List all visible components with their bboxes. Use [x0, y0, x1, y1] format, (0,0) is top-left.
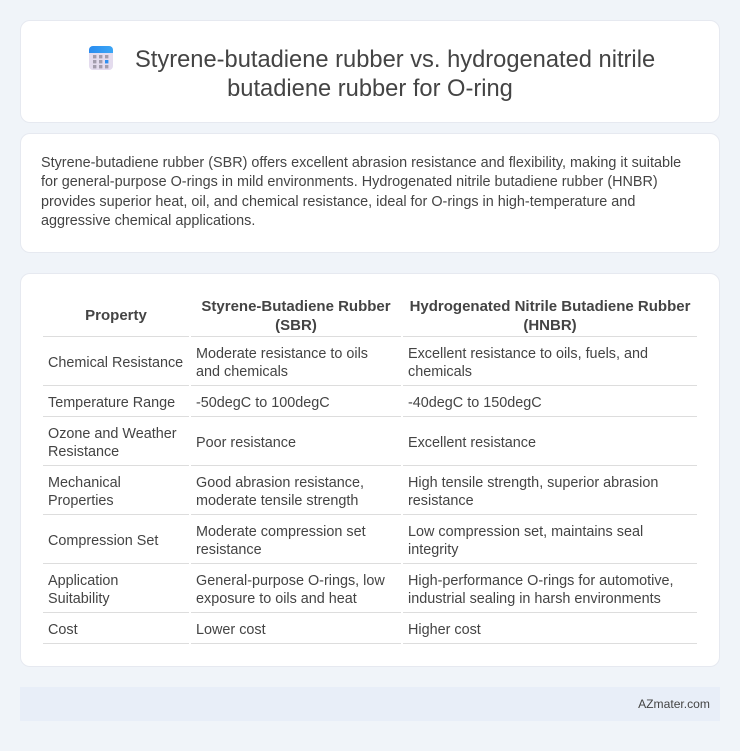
- text: High tensile strength, superior abrasion: [408, 475, 658, 491]
- text: Moderate compression set: [196, 524, 366, 540]
- summary text: [41, 155, 681, 229]
- text: -40degC to 150degC: [408, 395, 542, 411]
- row: compression set: [48, 524, 643, 558]
- text: resistance: [196, 542, 262, 558]
- text: Properties: [48, 493, 114, 509]
- text: industrial sealing in harsh environments: [408, 591, 661, 607]
- text: Moderate resistance to oils: [196, 346, 368, 362]
- summary card: [20, 133, 720, 253]
- text: Mechanical: [48, 475, 121, 491]
- table card: [20, 273, 720, 667]
- row: cost: [48, 622, 481, 638]
- header: property: Property: [85, 307, 147, 324]
- icon: calendar: [89, 46, 113, 70]
- text: and chemicals: [196, 364, 288, 380]
- text: High-performance O-rings for automotive,: [408, 573, 674, 589]
- text: Chemical Resistance: [48, 355, 183, 371]
- row: ozone and weather: [48, 426, 536, 460]
- text: chemicals: [408, 364, 472, 380]
- header: SBR: Styrene-Butadiene Rubber: [201, 298, 391, 315]
- text: Poor resistance: [196, 435, 296, 451]
- header: SBR: (SBR): [275, 317, 317, 334]
- text: Excellent resistance to oils, fuels, and: [408, 346, 648, 362]
- text: Excellent resistance: [408, 435, 536, 451]
- text: Good abrasion resistance,: [196, 475, 364, 491]
- text: -50degC to 100degC: [196, 395, 330, 411]
- summary text: for general-purpose O-rings in mild environments. Hydrogenated nitrile butadiene rubber (HNBR): [41, 174, 658, 190]
- title: Styrene-butadiene rubber vs. hydrogenated nitrile: [135, 47, 655, 73]
- summary text: provides superior heat, oil, and chemical resistance, ideal for O-rings in high-temperature and: [41, 194, 635, 210]
- title: [135, 47, 655, 102]
- header: SBR: [201, 298, 391, 334]
- text: integrity: [408, 542, 458, 558]
- text: Resistance: [48, 444, 119, 460]
- row: temperature range: [48, 395, 542, 411]
- title: butadiene rubber for O-ring: [227, 76, 513, 102]
- text: Higher cost: [408, 622, 481, 638]
- text: resistance: [408, 493, 474, 509]
- comparison table: [85, 298, 690, 334]
- summary text: Styrene-butadiene rubber (SBR) offers excellent abrasion resistance and flexibility, making it suitable: [41, 155, 681, 171]
- row: application suitability: [48, 573, 674, 607]
- text: Suitability: [48, 591, 110, 607]
- text: Cost: [48, 622, 78, 638]
- row: mechanical properties: [48, 475, 658, 509]
- text: General-purpose O-rings, low: [196, 573, 385, 589]
- text: Temperature Range: [48, 395, 175, 411]
- text: Ozone and Weather: [48, 426, 177, 442]
- text: Compression Set: [48, 533, 158, 549]
- text: Lower cost: [196, 622, 266, 638]
- text: exposure to oils and heat: [196, 591, 357, 607]
- text: moderate tensile strength: [196, 493, 358, 509]
- header: HNBR: (HNBR): [523, 317, 577, 334]
- row lines: [43, 336, 697, 644]
- footer text: AZmater.com: [638, 697, 710, 711]
- header: HNBR: Hydrogenated Nitrile Butadiene Rubber: [410, 298, 690, 315]
- title card: [20, 20, 720, 123]
- row: chemical resistance: [48, 346, 648, 380]
- text: Low compression set, maintains seal: [408, 524, 643, 540]
- summary text: aggressive chemical applications.: [41, 213, 255, 229]
- header: HNBR: [410, 298, 690, 334]
- text: Application: [48, 573, 118, 589]
- footer bar: [20, 687, 720, 721]
